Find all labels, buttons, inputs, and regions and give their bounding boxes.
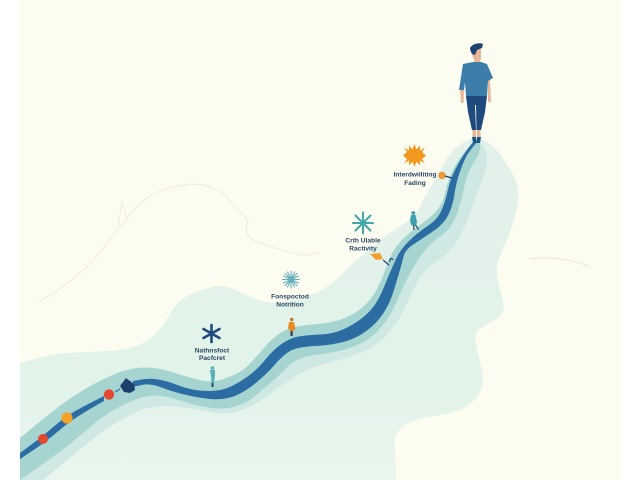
icon: pale teal snowflake [282,271,300,288]
icon: teal star [353,212,373,234]
red marker two [104,389,114,400]
faint line at right [529,258,590,267]
ankles [472,127,480,138]
small walker two [288,318,296,336]
orange dot near summit [438,172,452,179]
icon: orange sun [403,144,426,167]
small walker one [210,366,215,387]
shirt [459,62,493,96]
hair [470,43,483,55]
pale mint landscape [20,138,518,480]
shoes [472,137,481,143]
arms [460,80,491,103]
text: third label [345,238,381,252]
text: first label [195,348,230,362]
trousers [466,96,487,130]
text: second label [271,294,309,308]
neck and head [472,49,481,64]
text: first label: Nathnsfoct [195,348,230,354]
text: fourth label: Interdwiiliting [394,172,436,178]
small walker three [410,211,418,230]
blue river main segment [133,141,477,399]
faint background hill line [38,184,320,302]
text: fourth label [394,172,436,187]
text: third label: Ractivity [349,246,377,252]
blue river lower segment [20,396,104,459]
red marker [38,434,48,444]
text: second label: Fonspoctod [271,294,309,300]
person standing on summit [459,43,493,143]
orange marker [61,412,73,424]
start milestones [38,378,135,444]
dark house icon [120,378,135,393]
orange tool marker [370,253,393,265]
light teal band [20,140,487,480]
dashed connector [115,389,120,392]
text: first label: Pacfcret [199,355,226,362]
text: fourth label: Fading [404,180,426,187]
icon: navy asterisk [204,325,220,342]
text: third label: Crth Ulable [345,238,381,244]
mid teal band [20,140,480,480]
text: second label: Notrition [276,302,304,308]
